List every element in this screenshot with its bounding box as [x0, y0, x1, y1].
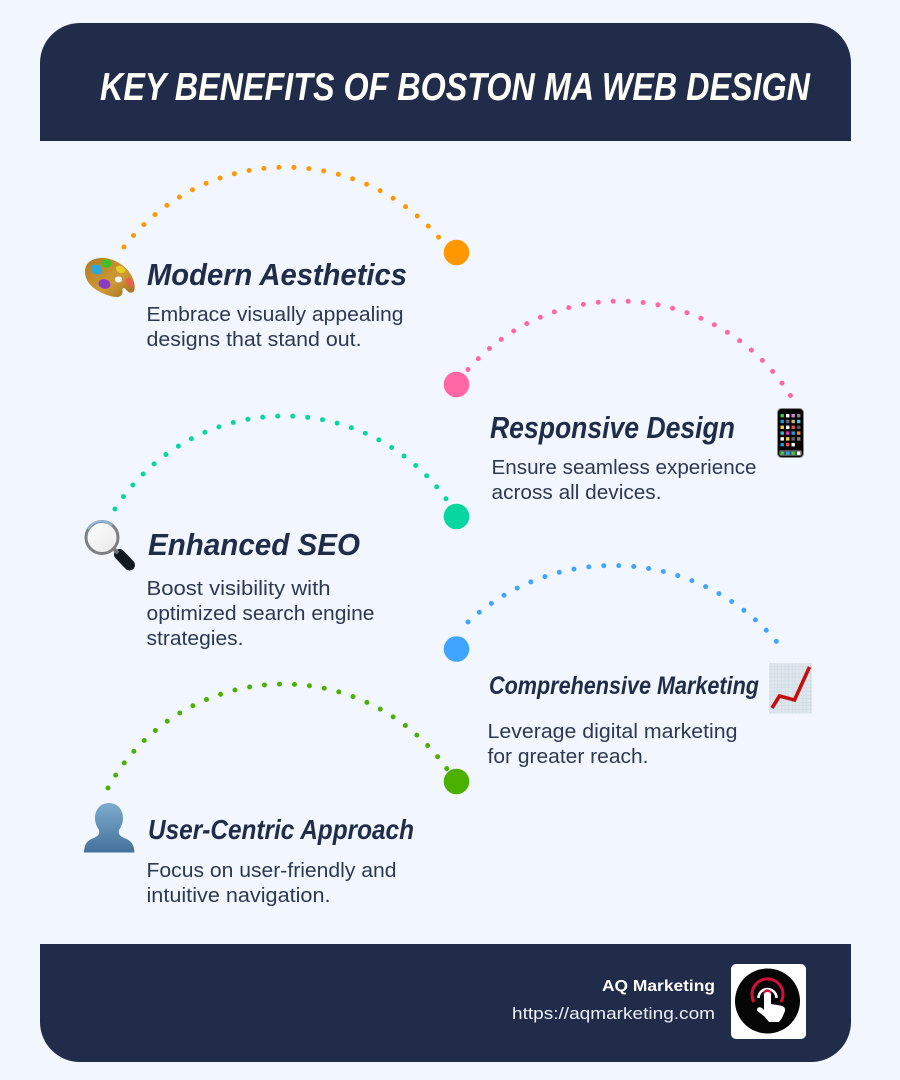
website url: https://aqmarketing.com — [512, 1004, 715, 1023]
description — [492, 457, 756, 504]
arc: green dotted — [108, 684, 447, 788]
heading: Modern Aesthetics — [147, 257, 407, 292]
heading: Enhanced SEO — [148, 527, 360, 562]
description: intuitive navigation. — [146, 885, 330, 907]
icon: rising chart — [769, 663, 812, 714]
arc: orange dotted — [124, 167, 441, 247]
description — [146, 860, 396, 907]
description — [146, 578, 374, 650]
description: Focus on user-friendly and — [146, 860, 396, 882]
heading: Comprehensive Marketing — [489, 672, 759, 700]
description — [488, 721, 738, 768]
node: blue — [444, 636, 469, 662]
description: Embrace visually appealing — [146, 304, 404, 326]
benefit: Modern Aesthetics — [85, 167, 469, 351]
icon: magnifying glass — [86, 521, 130, 565]
icon: smartphone — [777, 408, 804, 458]
heading: User-Centric Approach — [148, 814, 414, 845]
node: teal — [444, 504, 469, 529]
logo — [731, 964, 806, 1039]
benefit: Responsive Design — [444, 301, 804, 504]
brand name: AQ Marketing — [602, 978, 715, 995]
description: Boost visibility with — [146, 578, 330, 600]
description: designs that stand out. — [146, 329, 362, 351]
arc: pink dotted — [468, 301, 792, 398]
node: orange — [444, 240, 469, 265]
description: Leverage digital marketing — [488, 721, 738, 743]
footer band — [40, 944, 851, 1062]
description: for greater reach. — [488, 746, 648, 768]
description: across all devices. — [492, 482, 662, 504]
node: pink — [444, 372, 469, 397]
description: Ensure seamless experience — [492, 457, 756, 479]
node: green — [444, 769, 469, 794]
benefit: User-Centric Approach — [84, 684, 469, 907]
description: optimized search engine — [146, 603, 374, 625]
benefit: Enhanced SEO — [86, 416, 469, 650]
heading: Responsive Design — [490, 410, 735, 445]
arc: teal dotted — [115, 416, 449, 509]
icon: user silhouette — [84, 803, 134, 852]
arc: blue dotted — [468, 566, 784, 651]
description — [146, 304, 404, 351]
description: strategies. — [146, 628, 244, 650]
icon: artist palette — [85, 258, 135, 297]
benefit: Comprehensive Marketing — [444, 566, 812, 768]
header band — [40, 23, 851, 141]
